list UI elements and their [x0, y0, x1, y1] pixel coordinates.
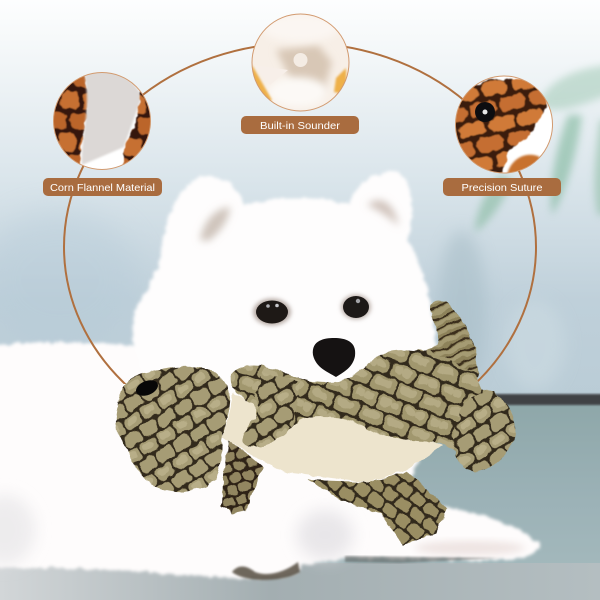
- dog head and ears: [132, 171, 436, 440]
- filling puff top: [267, 17, 333, 42]
- plush toy: [116, 301, 515, 545]
- floor foreground: [0, 563, 600, 600]
- toy back leg: [307, 472, 447, 545]
- dog body and forelegs: [0, 342, 541, 579]
- label: precision suture: [443, 178, 561, 196]
- detail: precision suture: [456, 76, 552, 172]
- toy body: [230, 301, 515, 472]
- detail: corn flannel material: [54, 73, 150, 169]
- flannel scales right: [122, 92, 150, 164]
- orange plush: [450, 79, 547, 178]
- ring: precision suture: [456, 76, 552, 173]
- toy front leg: [222, 440, 263, 513]
- dog: [0, 171, 541, 580]
- orange foot: [506, 153, 540, 172]
- right eye: [341, 294, 371, 320]
- label: precision suture: Precision Suture: [462, 182, 543, 194]
- filling puff bottom: [268, 77, 328, 107]
- background plant leaves: [475, 65, 600, 232]
- suture eye: [475, 102, 495, 122]
- left paw claws: [232, 562, 300, 580]
- sounder disc: [294, 53, 308, 67]
- right ear inner: [367, 200, 399, 226]
- body shading: [0, 495, 35, 565]
- translucent tag: [281, 69, 288, 74]
- label: corn flannel material: [43, 178, 162, 196]
- dog fur shapes: [0, 171, 541, 579]
- toy tail: [430, 301, 477, 375]
- ring: built-in sounder: [252, 14, 349, 111]
- toy belly: [223, 393, 443, 482]
- toy eye: [134, 377, 160, 399]
- left eye: [253, 298, 291, 326]
- detail: built-in sounder: [252, 14, 348, 110]
- label: built-in sounder: Built-in Sounder: [260, 120, 341, 132]
- connecting arc ring: [63, 46, 537, 384]
- toy front arm: [242, 372, 300, 447]
- toy rear foot: [454, 391, 515, 472]
- nose: [313, 338, 355, 377]
- foreleg contact shadow: [345, 556, 500, 563]
- flannel scales left: [54, 76, 88, 164]
- ring: corn flannel: [54, 72, 150, 170]
- left ear inner: [200, 207, 230, 241]
- chest shading: [297, 510, 353, 560]
- toy head: [116, 367, 230, 492]
- orange tag right: [334, 68, 347, 95]
- grey filling: [82, 70, 142, 165]
- orange tag left: [252, 64, 273, 102]
- right paw shading: [415, 541, 525, 555]
- filling fold: [276, 45, 332, 96]
- label: built-in sounder: [241, 116, 359, 134]
- label: corn flannel material: Corn Flannel Material: [50, 182, 155, 194]
